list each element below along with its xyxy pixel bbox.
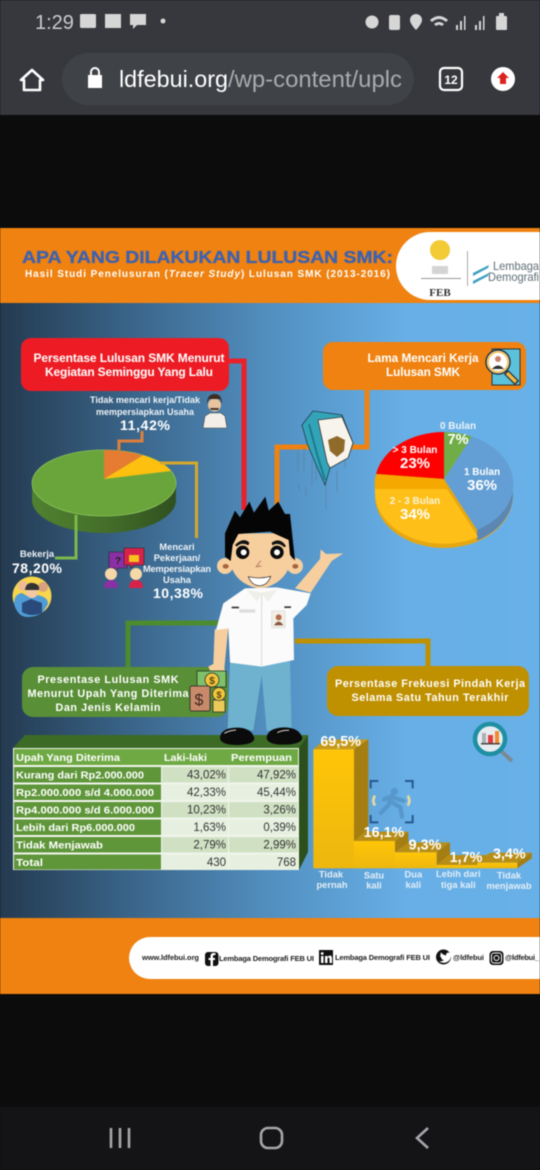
- table header: [14, 749, 298, 765]
- logo panel: [396, 232, 540, 300]
- left arm: [208, 627, 228, 674]
- home icon: [21, 70, 43, 90]
- axis labels: Satu: [364, 871, 384, 881]
- slice: 0 bulan: [444, 432, 472, 479]
- row labels: Rp2.000.000 s/d 4.000.000: [16, 787, 154, 799]
- panel: wage heading: Menurut Upah Yang Diterima: [28, 688, 189, 700]
- pie labels: job search duration: 34%: [400, 506, 430, 523]
- female values: 47,92%: [257, 770, 296, 782]
- pie labels: job search duration: 0 Bulan: [440, 421, 476, 432]
- contact pill: @ldfebui: [453, 953, 484, 962]
- panel: wage heading: [22, 667, 228, 717]
- icon: job seekers: [104, 548, 144, 588]
- contact pill: [129, 937, 540, 979]
- panel: job search duration heading: Lama Mencari Kerja: [368, 351, 479, 365]
- icon: money bag and coins: $: [209, 676, 215, 687]
- row labels: Total: [16, 857, 43, 869]
- male values: 430: [207, 857, 226, 869]
- female values: 3,26%: [263, 804, 296, 816]
- panel: job change heading: Persentase Frekuesi Pindah Kerja: [335, 678, 526, 690]
- male values: 43,02%: [187, 770, 226, 782]
- nose: [256, 561, 261, 567]
- male values: 42,33%: [187, 787, 226, 799]
- wage table: [13, 748, 299, 870]
- url bar: ldfebui.org: [119, 66, 228, 92]
- axis labels: Dua: [405, 869, 423, 879]
- table header: Perempuan: [231, 752, 292, 764]
- nav: recents: [111, 1128, 129, 1148]
- pie labels: job search duration: > 3 Bulan: [393, 445, 437, 456]
- subtitle: Hasil Studi Penelusuran (Tracer Study) Lulusan SMK (2013-2016): [25, 269, 390, 280]
- panel: activity heading: Kegiatan Seminggu Yang Lalu: [45, 365, 213, 379]
- shirt: [216, 587, 311, 667]
- tabs counter: [440, 68, 462, 90]
- phone status and browser bar: [0, 0, 540, 115]
- icon: money bag and coins: $: [195, 692, 204, 709]
- connector lines: [128, 361, 428, 668]
- contact pill: www.ldfebui.org: [141, 953, 199, 962]
- notification icons: [80, 14, 166, 29]
- male values: 2,79%: [193, 840, 226, 852]
- bar values: 1,7%: [450, 850, 483, 866]
- url bar: /wp-content/uplc: [228, 66, 402, 92]
- slice: not searching: [104, 450, 143, 479]
- table depth: [13, 735, 308, 870]
- ears: [217, 558, 233, 574]
- black band top: [0, 115, 540, 228]
- nav: home: [261, 1128, 282, 1148]
- panel: wage heading: Dan Jenis Kelamin: [56, 702, 160, 714]
- label: working: [12, 549, 63, 576]
- label: searching: [143, 542, 211, 601]
- phone navigation bar: [0, 1107, 540, 1170]
- title: APA YANG DILAKUKAN LULUSAN SMK:: [22, 247, 393, 267]
- label: searching: Pekerjaan/: [154, 553, 201, 563]
- slice: 1 bulan: [444, 436, 513, 530]
- label: not searching: [90, 395, 201, 433]
- label: searching: Mencari: [159, 542, 195, 552]
- panel: job change heading: [327, 666, 529, 716]
- row labels: Tidak Menjawab: [16, 840, 103, 852]
- raised arm: [295, 549, 343, 593]
- hair: [225, 497, 295, 561]
- pie labels: job search duration: 23%: [400, 455, 430, 472]
- tabs counter: 12: [444, 73, 458, 87]
- upload icon: [491, 67, 515, 91]
- character: student: [208, 497, 343, 745]
- icon: cv magnifier: [486, 349, 520, 385]
- panel: job search duration heading: Lulusan SMK: [386, 365, 460, 379]
- slice: 2-3 bulan: [375, 489, 478, 544]
- label: not searching: 11,42%: [120, 417, 171, 433]
- icon: money bag and coins: $: [216, 690, 222, 700]
- female values: 768: [277, 857, 296, 869]
- icon: money bag and coins: [190, 671, 226, 712]
- icon: instagram: [490, 951, 504, 965]
- url bar: [62, 53, 414, 105]
- panel: job change heading: Selama Satu Tahun Terakhir: [352, 692, 509, 704]
- male values: [187, 770, 226, 869]
- head: [229, 533, 292, 588]
- icon: graduation cap with flag pattern: [298, 411, 353, 510]
- pie leader lines: [55, 431, 196, 558]
- eyebrows: [235, 540, 286, 547]
- slice: 2-3 bulan wall: [375, 474, 447, 490]
- icon: linkedin: [319, 950, 333, 965]
- axis labels: kali: [406, 880, 421, 890]
- pie chart: activity: [32, 450, 176, 533]
- bar values: [320, 734, 526, 866]
- bar: dua kali: [395, 842, 450, 868]
- label: not searching: Tidak mencari kerja/Tidak: [90, 395, 201, 405]
- label: searching: Mempersiapkan: [143, 564, 211, 574]
- bar: tidak menjawab: [477, 853, 532, 868]
- label: searching: 10,38%: [153, 585, 204, 601]
- pie labels: job search duration: 7%: [448, 432, 469, 448]
- bar: lebih dari tiga kali: [437, 855, 490, 868]
- mouth: [248, 576, 271, 586]
- panel: activity heading: Persentase Lulusan SMK Menurut: [34, 351, 224, 365]
- row labels: Lebih dari Rp6.000.000: [16, 822, 135, 834]
- nav: back: [417, 1128, 428, 1148]
- axis labels: [316, 869, 532, 891]
- eyes: [236, 546, 249, 559]
- pie labels: job search duration: [390, 421, 500, 523]
- slice: over 3 bulan: [376, 432, 444, 479]
- axis labels: tiga kali: [441, 880, 476, 890]
- row labels: Rp4.000.000 s/d 6.000.000: [16, 804, 154, 816]
- icon: facebook: [205, 952, 218, 966]
- bar values: 9,3%: [409, 838, 442, 854]
- main background: [0, 303, 540, 918]
- bar: tidak pernah: [313, 739, 368, 868]
- icon: man in singlet: [203, 394, 227, 428]
- axis labels: Tidak: [497, 870, 522, 880]
- row labels: [16, 770, 154, 869]
- contact pill: @ldfebui_: [505, 953, 540, 962]
- label: not searching: mempersiapkan Usaha: [96, 407, 195, 417]
- contact pill: Lembaga Demografi FEB UI: [335, 953, 430, 962]
- female values: 45,44%: [257, 787, 296, 799]
- male values: 10,23%: [187, 804, 226, 816]
- female values: [257, 770, 296, 869]
- panel: wage heading: Presentase Lulusan SMK: [38, 674, 179, 686]
- icon: twitter: [436, 950, 452, 964]
- icon: chart magnifier: [475, 724, 512, 761]
- male values: 1,63%: [193, 822, 226, 834]
- header band: [0, 228, 540, 303]
- pie labels: job search duration: 2 - 3 Bulan: [390, 496, 440, 507]
- contact pill: Lembaga Demografi FEB UI: [219, 954, 314, 963]
- panel: activity heading: [21, 338, 229, 391]
- icon: job seekers: ?: [115, 556, 121, 567]
- axis labels: kali: [366, 881, 382, 891]
- row labels: Kurang dari Rp2.000.000: [16, 770, 144, 782]
- label: working: Bekerja: [20, 549, 55, 560]
- pie labels: job search duration: 1 Bulan: [464, 467, 500, 478]
- label: working: 78,20%: [12, 560, 63, 576]
- shoes: [220, 727, 302, 745]
- icon: runner in frame: [371, 781, 413, 822]
- pie labels: job search duration: 36%: [467, 477, 497, 494]
- axis labels: pernah: [316, 880, 348, 890]
- logo panel: FEB: [429, 287, 451, 299]
- label: searching: Usaha: [163, 575, 192, 585]
- slice: searching: [104, 455, 171, 479]
- axis labels: Tidak: [319, 869, 344, 879]
- bar values: 16,1%: [364, 825, 405, 841]
- panel: job search duration heading: [323, 342, 526, 390]
- bar chart: job change frequency: [313, 734, 532, 891]
- bar values: 69,5%: [320, 734, 361, 750]
- female values: 0,39%: [263, 822, 296, 834]
- black band bottom: [0, 994, 540, 1107]
- status time: 1:29: [35, 12, 74, 34]
- bar: satu kali: [354, 832, 408, 868]
- axis labels: Lebih dari: [436, 869, 481, 879]
- pants: [228, 660, 292, 732]
- female values: 2,99%: [263, 840, 296, 852]
- axis labels: menjawab: [486, 881, 532, 891]
- icon: workers group: [12, 576, 52, 617]
- pie chart: job search duration: [375, 432, 513, 548]
- footer band: [0, 918, 540, 994]
- table header: Laki-laki: [164, 752, 207, 764]
- bar values: 3,4%: [493, 847, 526, 863]
- table header: Upah Yang Diterima: [16, 752, 120, 764]
- system status icons: [366, 13, 507, 30]
